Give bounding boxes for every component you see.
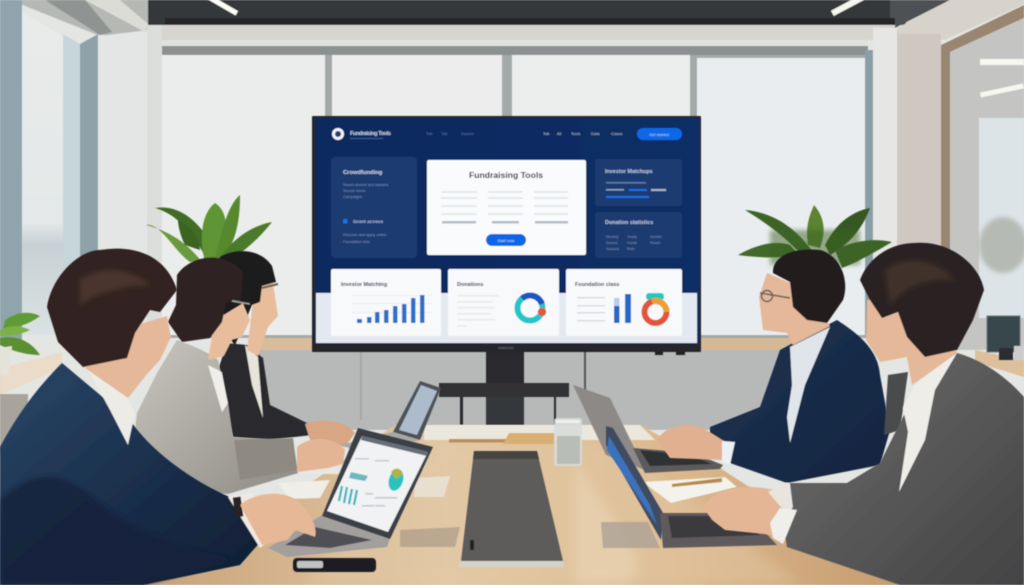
panel: crowdfunding: Campaigns (343, 195, 362, 199)
card: foundation class: Foundation class (575, 282, 619, 288)
donut chart (518, 295, 546, 320)
left window (0, 0, 98, 350)
right wall and glass door (873, 5, 1024, 355)
wall display: SAMSUNG (498, 346, 514, 350)
cuff and watch (228, 493, 270, 548)
nav bar: Data (591, 131, 600, 136)
plant: left behind display (146, 195, 272, 264)
card: investor matching bar chart (331, 269, 441, 336)
ceiling (0, 0, 1024, 40)
panel: donation statistics: Rate (627, 247, 635, 251)
display stand (439, 350, 685, 427)
laptop: right rear (573, 385, 723, 473)
bars (614, 298, 620, 306)
nav bar: Get started (649, 132, 669, 137)
panel: investor matchups (595, 159, 682, 206)
nav bar (332, 128, 682, 140)
card: foundation class (566, 269, 682, 336)
table items (278, 418, 737, 572)
panel: crowdfunding: Discover and apply online (343, 233, 386, 237)
nav bar: Tab (441, 131, 448, 136)
laptop charts (339, 458, 406, 507)
phone (293, 558, 376, 572)
pillar (99, 25, 162, 355)
button (486, 234, 526, 246)
wood sill (0, 338, 1024, 454)
display bezel (312, 116, 701, 352)
panel: fundraising tools card (427, 160, 586, 255)
panel: donation statistics: Funds (627, 241, 637, 245)
panel: donation statistics: Growth (650, 235, 662, 239)
nav bar: All (557, 131, 562, 136)
panel: crowdfunding (331, 157, 417, 258)
note paper on right (643, 477, 737, 503)
panel: donation statistics: Donation statistics (605, 220, 653, 226)
water glass (554, 418, 582, 466)
nav bar: Fundraising Tools (350, 131, 391, 137)
bars (357, 295, 424, 323)
panel: crowdfunding: Reach donors and backers (343, 183, 388, 187)
wall display (312, 116, 701, 352)
conference table (143, 425, 900, 585)
light lower band (316, 293, 697, 343)
chair (884, 372, 908, 435)
small monitor: right background (987, 316, 1024, 360)
laptop: right front (606, 426, 777, 548)
panel: donation statistics: Sources (606, 247, 619, 251)
wall beam above windows (160, 25, 895, 40)
nav bar: Tab (426, 131, 433, 136)
laptop: front left with charts (268, 428, 433, 557)
panel: crowdfunding: Secure funds (343, 189, 365, 193)
person: right man in navy jacket (657, 250, 890, 483)
plant: right behind display (738, 205, 892, 268)
panel: crowdfunding: Grant access (353, 219, 383, 225)
panel: donation statistics (595, 212, 682, 258)
panel: donation statistics: Donors (606, 241, 618, 245)
card: donations donut: Donations (457, 282, 483, 288)
ring chart (644, 293, 667, 323)
person: woman in grey jacket (133, 258, 345, 494)
nav bar: Tab (543, 131, 550, 136)
notebook (449, 433, 555, 444)
nav bar: Cases (611, 131, 622, 136)
panel: donation statistics: Reach (650, 241, 660, 245)
back table light strip (424, 425, 655, 440)
panel: donation statistics: Monthly (606, 235, 619, 239)
panel: fundraising tools card: Start now (498, 238, 515, 243)
person: front-left man in navy jacket (0, 249, 270, 585)
nav bar: Tools (571, 131, 580, 136)
tablet panel (459, 451, 564, 567)
person: right front man in grey jacket (703, 243, 1024, 585)
papers on left (278, 480, 330, 499)
hand: front-left man typing (240, 494, 316, 545)
card: donations donut (448, 269, 559, 336)
panel: crowdfunding: Crowdfunding (343, 170, 383, 176)
panel: crowdfunding: Foundation lists (343, 240, 370, 244)
lower wall (250, 350, 795, 430)
person: back woman in dark jacket (214, 251, 355, 447)
table shadows (601, 522, 660, 548)
nav bar: Search (461, 131, 474, 136)
panel: fundraising tools card: Fundraising Tools (469, 170, 543, 180)
back windows (162, 50, 873, 338)
panel: investor matchups: Investor Matchups (605, 169, 653, 175)
screen background (315, 118, 699, 344)
card: investor matching bar chart: Investor Matching (341, 282, 387, 288)
panel: donation statistics: Yearly (627, 235, 637, 239)
plant: left window sill (0, 313, 40, 375)
laptop: back left (340, 381, 441, 455)
